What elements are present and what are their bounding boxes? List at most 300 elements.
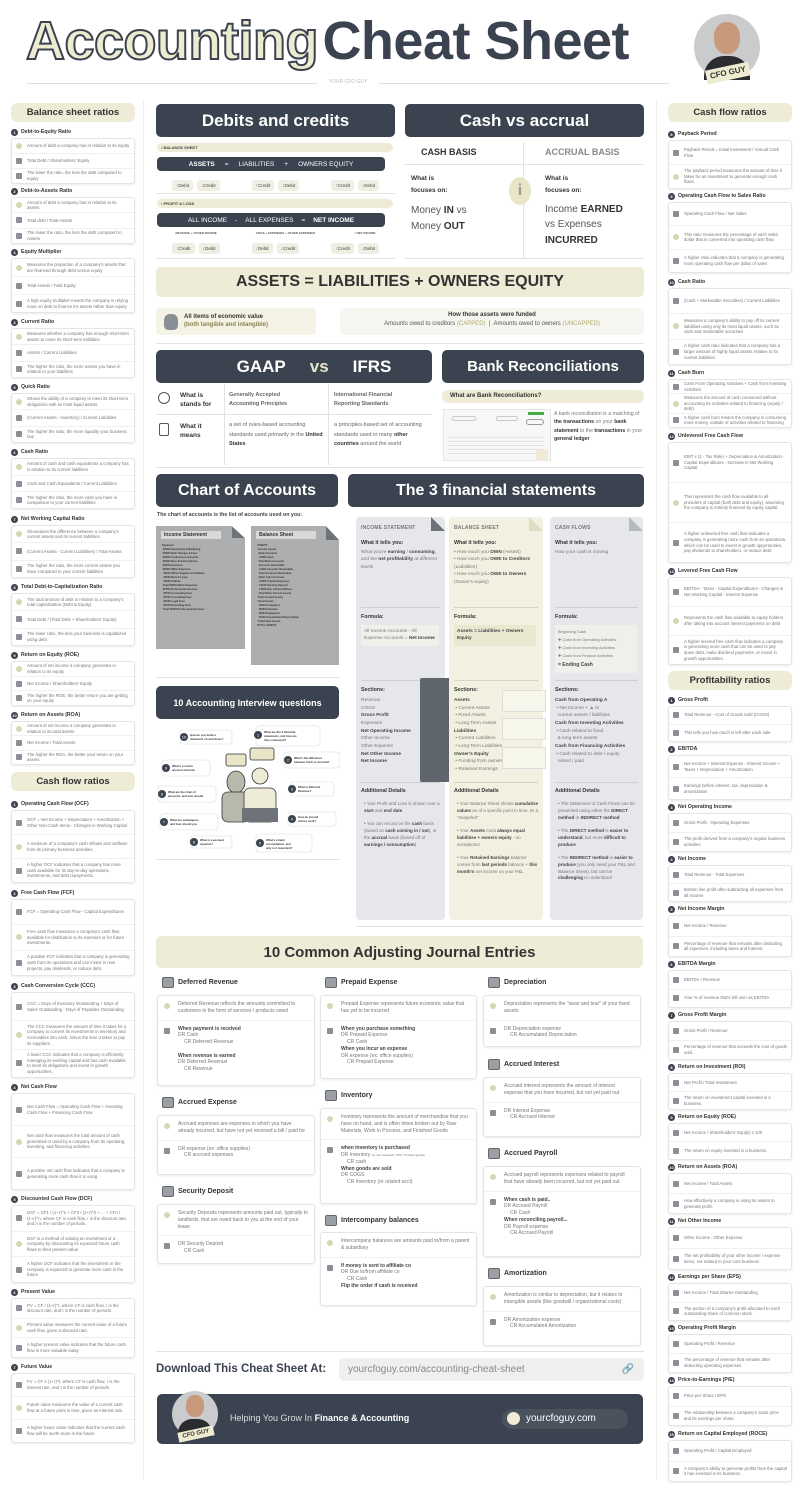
panel: balance sheet statement: • How much you OWE to Creditors (Liabilities) <box>454 557 530 570</box>
ratio: payback period: Payback Period <box>678 131 717 137</box>
ratio: payback period: The payback period measures the amount of time it takes for an investment to generate enough cash flows <box>684 168 782 184</box>
panel: balance sheet statement: Owner's Equity <box>454 752 489 757</box>
icon: money bag <box>164 314 178 330</box>
ratio: ROA: Return on Assets (ROA) <box>21 712 80 718</box>
heading: bank reconciliations <box>442 350 644 383</box>
ratio: net other income: Net Other Income <box>678 1218 721 1224</box>
text: CR Accumulated Amortization <box>510 1323 576 1329</box>
ratio: unlevered FCF: Unlevered Free Cash Flow <box>678 433 743 439</box>
ratio: EPS: Earnings per Share (EPS) <box>678 1274 741 1280</box>
ratio: quick ratio: Shows the ability of a company to meet its short-term obligations with its most liquid assets <box>27 396 128 407</box>
ratio: future value: 7 <box>13 1364 16 1370</box>
ratio: EBITDA margin: 6 <box>670 962 673 966</box>
ratio: debt to assets: 2 <box>13 188 16 194</box>
ratio: NOI <box>668 804 792 853</box>
doc: balance sheet accounts: 15010 Computers <box>258 604 280 607</box>
entry: amortization: Amortization <box>504 1270 547 1277</box>
doc: income statement accounts: Income Statement <box>164 532 207 538</box>
panel: income statement: • You can record on the cash basis (based on cash coming in / out), or the accrual basis (based off of earnings / consumption) <box>364 821 437 846</box>
heading: GAAP vs IFRS: IFRS <box>353 356 391 376</box>
text: DR Security Deposit <box>178 1241 223 1247</box>
profit and loss equation bar: NET INCOME <box>313 216 354 224</box>
text: DR Prepaid Expense <box>341 1032 388 1038</box>
entry: deferred revenue: Deferred Revenue <box>178 979 238 986</box>
ratio: debt to assets: Total debt / Total Assets <box>27 218 72 223</box>
ratio: unlevered FCF: This represents the cash flow available to all providers of capital (both debt and equity), assuming the company is entirely financed by equity capital. <box>684 494 784 510</box>
ratio: DCF: DCF = CF1 / (1+r)^1 + CF2 / (1+r)^2 + ... + CFn / (1+r)^n, where CF is cash flow, r is the discount rate, and n is the number of periods. <box>27 1210 127 1226</box>
ratio: current ratio <box>11 319 135 379</box>
ratio: CCC <box>11 983 135 1079</box>
text: CR Accrued Interest <box>510 1114 555 1120</box>
footer website pill <box>502 1409 628 1429</box>
balance sheet equation bar: = <box>225 160 228 168</box>
cash basis text: Money IN vs <box>411 205 467 216</box>
illustration: interview questions: 5 <box>259 840 262 846</box>
ratio: unlevered FCF: 12 <box>669 434 674 438</box>
ratio: cash burn: Measures the amount of cash consumed without accounting for activities related to financing (equity / debt) <box>684 395 783 411</box>
ratio: ROA (right): How effectively a company is using its assets to generate profit. <box>684 1198 775 1208</box>
doc: balance sheet accounts: Other Current Assets <box>258 576 285 579</box>
row: what it means: means <box>180 432 201 439</box>
panel: balance sheet ratios (left) <box>11 103 135 1444</box>
cash basis text: Money OUT <box>411 221 465 232</box>
panel: cash vs accrual <box>405 142 644 260</box>
ratio: future value: FV = CF x (1+r)^t, where CF is cash flow, r is the interest rate, and t is the number of periods. <box>27 1379 120 1390</box>
ratio: ROE: The higher the ROE, the better return you are getting on your equity <box>27 693 128 703</box>
ratio: debt to capitalization: The total amount of debt in relation to a company's total capitalization (Debt & Equity) <box>27 597 123 607</box>
logo: photo <box>694 14 760 84</box>
ratio: present value: Present value measures the current value of a future cash flow, given a discount rate. <box>27 1322 127 1333</box>
ratio: gross profit margin: Percentage of revenue that exceeds the cost of goods sold. <box>684 1044 787 1055</box>
illustration: interview questions: statement of cash flows? <box>190 737 224 741</box>
entry: intercompany balances <box>325 1215 419 1226</box>
ratio: operating profit margin <box>668 1324 792 1373</box>
row: what it means: a principles-based set of accounting standards used in many other countries around the world <box>334 422 422 447</box>
panel: balance sheet statement: • Your Assets must always equal liabilities + owners equity - no exceptions! <box>457 828 525 846</box>
doc: income statement accounts: 60700 Professional Services <box>163 588 198 591</box>
footer photo: CFO GUY <box>182 1428 210 1440</box>
ratio: operating profit margin: Operating Profit Margin <box>678 1325 736 1331</box>
ratio: OCF: A higher OCF indicates that a company has more cash available for its day-to-day operations, investments, and debt repayments. <box>27 862 121 878</box>
ratio: debt to assets <box>11 188 135 245</box>
ratio: debt to capitalization: Total Debt / (Total Debt + Shareholders' Equity) <box>27 617 117 622</box>
profit and loss equation bar: ALL EXPENSES <box>245 216 293 224</box>
ratio: DCF: Discounted Cash Flow (DCF) <box>21 1196 92 1202</box>
icon: info: i <box>518 182 522 199</box>
illustration: interview questions: why is it important? <box>265 846 293 850</box>
doc: balance sheet accounts: 12000 Prepaid Expenses <box>259 580 289 583</box>
ratio: payback period <box>668 131 792 190</box>
text: Security Deposits represents amounts paid out, typically to landlords, that are owed back to you at the end of your lease <box>178 1210 308 1230</box>
balance sheet equation bar: + <box>284 160 288 168</box>
ratio: quick ratio: 5 <box>13 384 16 390</box>
panel: cash flows statement: CASH FLOWS <box>555 525 591 531</box>
ratio: net cash flow: Net Cash Flow <box>21 1084 57 1090</box>
ratio: unlevered FCF <box>668 433 792 564</box>
ratio: debt to equity: 1 <box>13 130 16 134</box>
ratio: OCF to sales: Operating Cash Flow to Sales Ratio <box>678 193 766 199</box>
ratio: net working capital <box>11 516 135 579</box>
ratio: operating profit margin: Operating Profit / Revenue <box>684 1341 735 1346</box>
panel: income statement: Sections: <box>361 687 385 693</box>
entry: security deposit: Security Deposit <box>178 1188 233 1195</box>
ratio: unlevered FCF: EBIT x (1 - Tax Rate) + Depreciation & Amortization - Capital Expenditures - Increase in Net Working Capital <box>684 454 784 470</box>
doc: income statement accounts: Expenses <box>162 544 174 547</box>
ratio: debt to capitalization: Total Debt-to-Capitalization Ratio <box>21 584 102 590</box>
illustration: interview questions: accounts, and how should <box>168 794 203 798</box>
ratio: ROE (right): Net Income / Shareholders' Equity) x 100 <box>684 1130 762 1135</box>
ratio: ROE <box>11 652 135 707</box>
ratio: future value: Future value measures the value of a current cash flow at a future point in time, given an interest rate. <box>27 1402 123 1413</box>
doc: balance sheet accounts: Total Accounts Receivable <box>258 572 291 575</box>
ratio: cash ratio: 6 <box>13 450 16 454</box>
ratio: net cash flow: Net cash flow measures the total amount of cash generated or used by a company from its operating, investing, and financing activities. <box>27 1133 125 1149</box>
url box <box>339 1358 644 1381</box>
ratio: OCF to sales: This ratio measures the percentage of each sales dollar that is converted into operating cash flow. <box>684 232 778 242</box>
ratio: net income: Total Revenue - Total Expenses <box>684 872 744 877</box>
ratio: equity multiplier: A high equity multiplier means the company is relying more on debt to finance it's assets rather than equity <box>27 298 128 308</box>
ratio: present value: PV = CF / (1+r)^t, where CF is cash flow, r is the discount rate, and t is the number of periods. <box>27 1303 119 1313</box>
ratio: OCF: 1 <box>13 802 16 806</box>
panel: income statement <box>356 517 445 920</box>
ratio: cash ratio (right): Measures a company's ability to pay off its current liabilities using only its most liquid assets, such as cash and marketable securities <box>684 318 779 334</box>
heading: balance sheet ratios <box>11 103 135 122</box>
profit and loss equation bar: = <box>301 216 305 224</box>
pill: what are bank reconciliations <box>442 390 644 403</box>
debit credit chips row 2: ↑Credit <box>335 246 350 251</box>
heading: cash vs accrual <box>405 104 644 137</box>
ratio: net income margin <box>668 906 792 958</box>
ratio: OCF: A measure of a company's cash inflows and outflows from its primary business activities. <box>27 841 127 852</box>
panel: income statement: COGS <box>361 706 375 711</box>
panel: cash flows statement: raised / paid <box>558 759 584 764</box>
panel: cash flows statement: Cash from Financing Activities <box>555 744 625 749</box>
panel: cash flows statement <box>550 517 643 920</box>
divider lines vertical <box>143 100 144 1480</box>
row: what it stands for: Reporting Standards <box>334 401 388 407</box>
ratio: levered FCF: A higher levered free cash flow indicates a company is generating more cash that can be used to pay down debt, make dividend payments, or invest in growth opportunities. <box>684 639 783 661</box>
ratio: quick ratio: The higher the ratio, the more liquidity your business has <box>27 429 127 439</box>
panel: cash flows statement: Additional Details <box>555 788 600 794</box>
panel: cash flows statement: • Cash related to debt / equity <box>556 752 619 757</box>
ratio: debt to assets: The lower the ratio, the less the debt compared to Assets <box>27 230 122 241</box>
doc: income statement accounts: 60610 Office Supplies & Software <box>163 572 205 575</box>
illustration: interview questions: What's a bank <box>266 838 285 842</box>
illustration: interview questions: What is Deferred <box>298 785 321 789</box>
ratio: FCF: 2 <box>13 890 16 896</box>
panel: income statement: Additional Details <box>361 788 406 794</box>
row: what it means: What it <box>180 423 202 430</box>
ratio: debt to assets: Amount of debt a company has in relation to its assets <box>27 200 117 210</box>
illustration: interview questions: 9 <box>165 766 168 770</box>
ratio: CCC: CCC = Days of Inventory Outstanding + Days of Sales Outstanding - Days of Payables Outstanding <box>27 1001 124 1012</box>
ratio: cash ratio: Cash Ratio <box>21 449 48 455</box>
text: DR Amortization expense <box>504 1316 560 1322</box>
text: DR COGS <box>341 1172 364 1178</box>
accrual basis text: vs Expenses <box>545 219 602 230</box>
small labels: = NET INCOME <box>354 231 376 235</box>
box: all items of economic value: (both tangible and intangible) <box>184 322 268 328</box>
panel: balance sheet statement: • Your Retained Earnings balance comes from last periods balance + this month's net income on your P&L <box>457 855 537 874</box>
panel: debits and credits <box>156 142 395 260</box>
illustration: interview questions: How do journal <box>298 815 318 819</box>
doc: income statement accounts: 60600 Office Expenses <box>163 568 191 571</box>
ratio: ROE (right) <box>668 1114 792 1161</box>
footer website pill: yourcfoguy.com <box>526 1413 596 1424</box>
profit and loss equation bar: ALL INCOME <box>188 216 227 224</box>
ratio: P/E <box>668 1376 792 1426</box>
entry: security deposit <box>162 1186 233 1197</box>
ratio: payback period: 8 <box>670 132 673 136</box>
doc: balance sheet accounts: Balance Sheet <box>259 532 293 538</box>
panel: income statement: INCOME STATEMENT <box>361 525 415 531</box>
illustration: interview questions: What are the 3 financial <box>264 730 295 734</box>
ratio: cash burn: A higher cash burn means the company is consuming more money, outside of activities related to financing <box>684 415 786 425</box>
ratio: net other income: 11 <box>669 1218 674 1224</box>
debit credit chips row 1: ↓Debit <box>362 183 375 188</box>
illustration: interview questions: and how should you <box>170 822 197 826</box>
doc: balance sheet accounts: 15020 Furniture <box>258 608 278 611</box>
debit credit chips row 2: ↓Credit <box>281 246 295 251</box>
illustration: interview questions: between Cash vs Accrual? <box>294 760 330 764</box>
ratio: cash ratio (right): A higher cash ratio indicates that a company has a larger amount of highly liquid assets relative to its current liabilities <box>684 343 780 360</box>
illustration: interview questions: they connected? <box>264 738 287 742</box>
ratio: EBITDA <box>668 746 792 801</box>
debit credit chips row 1: ↓Debit <box>282 183 295 188</box>
url box: 🔗 <box>622 1364 634 1375</box>
ratio: cash ratio (right): Cash Ratio <box>678 279 705 285</box>
ratio: levered FCF: Represents the cash flow available to equity holders after taking into account interest payments on debt <box>684 615 783 626</box>
ratio: debt to capitalization: The lower ratio, the less your business is capitalized using debt <box>27 631 126 642</box>
small labels <box>156 231 395 235</box>
entry: accrued expense: Accrued Expense <box>178 1099 237 1106</box>
panel: income statement: Other Expense <box>361 744 393 749</box>
ratio: NOI: The profit derived from a company's regular business activities <box>684 836 785 847</box>
illustration: interview questions: What's the difference <box>294 756 323 760</box>
ratio: CCC: The CCC measures the amount of time it takes for a company to convert its investments in inventory and receivables into cash, minus the time it takes to pay its suppliers. <box>27 1024 126 1046</box>
text: DR Depreciation expense <box>504 1026 561 1032</box>
ratio: EBITDA margin: Your % of revenue that's left over as EBITDA <box>684 995 769 1000</box>
heading: cash flow ratios (right) <box>668 103 792 122</box>
panel: income statement: All Income Accounts - All Expense Accounts = Net Income <box>364 629 435 641</box>
ratio: FCF: Free Cash Flow (FCF) <box>21 890 74 896</box>
ratio: ROE (right): Return on Equity (ROE) <box>678 1114 736 1120</box>
text: Accrued interest represents the amount of interest expense that you have incurred, but not yet paid out <box>504 1083 619 1096</box>
profit and loss equation bar <box>157 213 385 227</box>
text: DR Deferred Revenue <box>178 1059 227 1065</box>
ratio: net working capital: 7 <box>13 516 16 522</box>
ratio: CCC: 3 <box>13 984 16 988</box>
entry: prepaid expense: Prepaid Expense <box>341 979 397 986</box>
heading: GAAP vs IFRS: GAAP <box>237 356 286 376</box>
ratio: EBITDA margin: EBITDA Margin <box>678 961 716 967</box>
cash basis header: CASH BASIS <box>421 147 477 157</box>
ratio: unlevered FCF: A higher unlevered free cash flow indicates a company is generating more cash from its operations, which can be used to invest in growth opportunities, pay dividends to shareholders, or reduce debt. <box>684 531 786 553</box>
ratio: FCF: Free cash flow measures a company's cash flow available for distribution to its investors or for future investments. <box>27 929 124 945</box>
text: DR Inventory (or raw materials / WIP / finished goods) <box>341 1152 425 1158</box>
doc: balance sheet accounts: 13000 Due to/from Officers <box>259 588 292 591</box>
illustration: interview questions: account and how <box>172 768 196 772</box>
row: what it means <box>156 419 432 464</box>
ratio: EBITDA margin <box>668 961 792 1009</box>
illustration: interview questions: 1 <box>257 732 260 738</box>
heading: cash vs accrual: Cash vs accrual <box>460 110 589 130</box>
illustration: interview questions: 2 <box>287 758 290 762</box>
panel: income statement: Net Operating Income <box>361 729 411 734</box>
ratio: cash ratio: The higher the ratio, the more cash you have in comparison to your current liabilities <box>27 495 117 505</box>
panel: cash flows statement: Cash from Investing Activities <box>555 721 624 726</box>
doc: balance sheet accounts: 10000 Cash <box>259 556 273 559</box>
heading: 3 financial statements <box>348 474 644 507</box>
small labels: REVENUE + OTHER INCOME <box>175 231 217 235</box>
panel: balance sheet statement: • Your Balance Sheet shows cumulative values as of a specific point in time, IE a "snapshot" <box>457 801 538 820</box>
heading: GAAP vs IFRS <box>156 350 432 383</box>
ratio: gross profit: Total Revenue - Cost of Goods Sold (COGS) <box>684 712 769 717</box>
ratio: equity multiplier: Measures the proportion of a company's assets that are financed through debt versus equity <box>27 262 126 272</box>
heading: chart of accounts: Chart of Accounts <box>178 482 316 498</box>
text: Accrued payroll represents expenses related to payroll that have already been incurred, but not yet paid out <box>504 1172 625 1185</box>
panel: balance sheet statement: • Long Term Assets <box>455 721 496 726</box>
doc: balance sheet accounts: 15100 Accumulated Depreciation <box>258 616 299 619</box>
ratio: ROCE: A company's ability to generate profits from the capital it has invested in its business. <box>684 1466 787 1476</box>
panel: balance sheet statement: Assets = Liabilities + Owners Equity <box>457 629 523 641</box>
ratio: net working capital: The higher the ratio, the more current assets you have compared to your current liabilities <box>27 563 120 574</box>
ratio: net income margin: Net Income Margin <box>678 906 724 912</box>
subtitle line: YOUR CFO GUY <box>329 79 367 85</box>
text: When you purchase something <box>341 1026 415 1032</box>
doc: income statement accounts: 60200 Bank Charges & Fees <box>163 552 197 555</box>
doc: balance sheet accounts: Total Fixed Assets <box>258 620 280 623</box>
ratio: EBITDA: Earnings before interest, tax, depreciation & amortization <box>684 783 768 794</box>
panel: balance sheet statement: Sections: <box>454 687 478 693</box>
ratio: net income margin: Net Income / Revenue <box>684 923 727 928</box>
row: what it stands for <box>156 389 432 413</box>
debit credit chips row 2 <box>156 238 395 254</box>
text: When you incur an expense <box>341 1046 407 1052</box>
illustration: interview questions: 4 <box>291 816 294 822</box>
ratio: operating profit margin: The percentage of revenue that remains after deducting operating expenses. <box>684 1357 770 1368</box>
ratio: net working capital: Showcases the difference between a company's current assets and its current liabilities <box>27 529 119 539</box>
ratio: OCF: Operating Cash Flow (OCF) <box>21 801 89 807</box>
illustration: interview questions: reconciliation, and <box>266 842 291 846</box>
ratio: DCF <box>11 1196 135 1284</box>
ratio: cash ratio (right): (Cash + Marketable Securities) / Current Liabilities <box>684 298 780 303</box>
ratio: net other income: The net profitability of your other income / expense items, not related to your core business <box>684 1253 780 1264</box>
table: GAAP vs IFRS <box>156 384 432 465</box>
panel: cash flows statement: How your cash is moving <box>555 550 608 555</box>
ratio: ROCE: Operating Profit / Capital Employed <box>684 1448 751 1453</box>
illustration: interview questions <box>156 722 340 854</box>
panel: cash flow & profitability ratios (right) <box>668 103 792 1483</box>
ratio: current ratio: Current Ratio <box>21 319 54 325</box>
ratio: OCF to sales: 9 <box>670 194 673 198</box>
debit credit chips row 1: ↑Debit <box>176 183 189 188</box>
ratio: cash ratio: Cash and Cash Equivalents / Current Liabilities <box>27 481 117 486</box>
ratio: ROA (right): Net Income / Total Assets <box>684 1181 732 1186</box>
panel: balance sheet statement: What it tells you: <box>454 540 496 546</box>
doc: balance sheet accounts: Accounts Receivable <box>258 564 285 567</box>
box: how assets were funded: Amounts owed to creditors (CAPPED) | Amounts owed to owners (UNCAPPED) <box>384 321 600 327</box>
equation banner <box>156 267 644 297</box>
ratio: debt to equity: Amount of debt a company has in relation to its equity <box>27 143 129 148</box>
entry: depreciation: Depreciation <box>504 979 546 986</box>
panel: cash flows statement: & long term assets <box>558 736 597 741</box>
ratio: ROI: The return on investment capital invested in a business. <box>684 1095 771 1106</box>
doc: income statement accounts: 60740 Recruiting Fees <box>163 604 191 607</box>
accrual basis text: focuses on: <box>545 187 581 194</box>
debit credit chips row 2: ↑Debit <box>256 246 269 251</box>
cash basis text: focuses on: <box>411 187 447 194</box>
text: When revenue is earned <box>178 1052 236 1058</box>
panel: income statement: Other Income <box>361 736 390 741</box>
ratio: FCF <box>11 890 135 977</box>
ratio: ROCE <box>668 1430 792 1482</box>
box: how assets were funded <box>340 308 644 335</box>
doc: balance sheet accounts: Bank Accounts <box>258 552 277 555</box>
panel: income statement: Gross Profit <box>361 713 389 718</box>
box: all items of economic value <box>156 308 316 335</box>
ratio: quick ratio <box>11 384 135 444</box>
ratio: net income margin: 5 <box>670 906 673 912</box>
text: CR Prepaid Expense <box>347 1059 394 1065</box>
heading: cash flow ratios (left): Cash flow ratios <box>36 776 110 787</box>
panel: income statement: Net Income <box>361 759 387 764</box>
ratio: ROI: Return on Investment (ROI) <box>678 1064 745 1070</box>
ratio: OCF to sales <box>668 193 792 274</box>
ratio: net working capital: Net Working Capital Ratio <box>21 516 85 522</box>
panel: balance sheet statement: • How much you OWN (Assets) <box>454 550 521 555</box>
ratio: FCF: FCF = Operating Cash Flow - Capital Expenditures <box>27 909 124 914</box>
ratio: net income: 4 <box>670 856 673 862</box>
text: DR Interest Expense <box>504 1108 550 1114</box>
ratio: current ratio: 4 <box>13 320 16 324</box>
panel: cash flows statement: ✚ Cash from Finance Activities <box>558 653 613 658</box>
panel: cash flows statement: ✚ Cash from Operating Activities <box>558 637 616 642</box>
ratio: ROE: Amount of net income a company generates in relation to its equity <box>27 663 116 674</box>
ratio: cash ratio (right): 10 <box>669 280 674 284</box>
ratio: net income: Bottom line profit after subtracting all expenses from all income <box>684 887 783 898</box>
text: Prepaid Expense represents future economic value that has yet to be incurred <box>341 1001 464 1014</box>
ratio: EPS: 12 <box>669 1274 674 1280</box>
row: what it means: a set of rules-based accounting standards used primarily in the United States <box>229 422 323 447</box>
doc: income statement accounts: 60730 Legal Fees <box>163 600 185 603</box>
balance sheet pill <box>157 143 393 152</box>
ratio: ROE (right): The return on equity invested in a business. <box>684 1148 767 1153</box>
panel: income statement: What it tells you: <box>361 540 403 546</box>
ratio: net other income <box>668 1218 792 1271</box>
box: all items of economic value: All items of economic value <box>184 314 263 320</box>
heading: 10 accounting interview questions <box>156 686 339 719</box>
ratio: DCF: A higher DCF indicates that the investment or the company is expected to generate more cash in the future <box>27 1261 123 1277</box>
ratio: ROE: Net Income / Shareholders' Equity <box>27 681 92 686</box>
ratio: cash burn: Cash From Operating Activities + Cash from Investing Activities <box>684 381 786 392</box>
text: CR Accrued Payroll <box>510 1230 553 1236</box>
text: Amortization is similar to depreciation, but it relates to intangible assets (like goodwill / organizational costs) <box>504 1292 622 1305</box>
accrual basis header: ACCRUAL BASIS <box>545 147 619 157</box>
panel: income statement: Expenses <box>361 721 382 726</box>
ratio: current ratio: The higher the ratio, the more assets you have in relation to your liabilities <box>27 364 120 374</box>
entry: accrued payroll <box>488 1148 557 1159</box>
ratio: P/E: Price per Share / EPS <box>684 1393 726 1398</box>
doc: balance sheet accounts: Fixed Assets <box>258 600 274 603</box>
doc: income statement accounts: 60500 Insurance <box>163 564 183 567</box>
entry: accrued payroll: Accrued Payroll <box>504 1150 557 1157</box>
ratio: present value <box>11 1289 135 1359</box>
accrual basis text: Income EARNED <box>545 204 623 215</box>
panel: balance sheet statement: • Funding from owners <box>455 759 503 764</box>
entry: accrued interest <box>488 1059 559 1070</box>
doc: income statement accounts: 60630 Utilities <box>163 580 181 583</box>
